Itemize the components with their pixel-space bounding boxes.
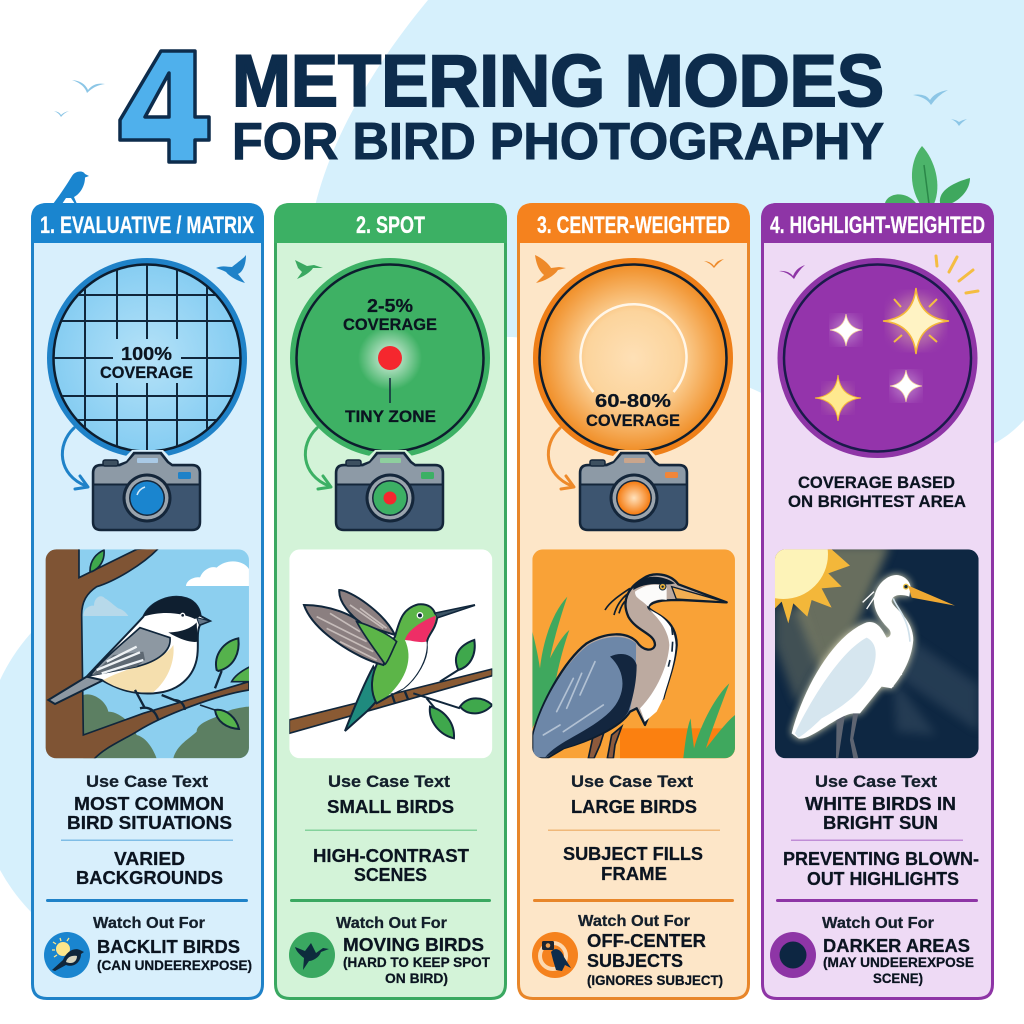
glow (792, 575, 913, 739)
coverage caption (788, 473, 966, 511)
use case text: OUT HIGHLIGHTS (807, 869, 959, 889)
coverage circle: TINY ZONE (345, 407, 436, 426)
use case text: Use Case Text (815, 772, 937, 791)
small birds (535, 255, 724, 283)
title line 1: METERING MODES (232, 41, 884, 122)
watch out for: Watch Out For (336, 915, 447, 932)
header title: 2. SPOT (356, 212, 425, 239)
panel 4: highlight-weighted (739, 203, 994, 998)
use case text: Use Case Text (328, 772, 450, 791)
coverage circle: 2-5% (367, 295, 413, 316)
coverage circle with grid: COVERAGE (100, 363, 193, 382)
arrow to camera (548, 428, 574, 489)
use case text: Use Case Text (571, 772, 693, 791)
watch out for: MOVING BIRDS (343, 935, 484, 955)
camera (90, 450, 203, 534)
use case text: BACKGROUNDS (76, 868, 223, 888)
camera (577, 450, 690, 534)
big numeral 4 (120, 51, 209, 162)
photo: egret (775, 549, 979, 758)
sparkle glows (890, 295, 942, 347)
use case text (290, 772, 491, 902)
watch out for (532, 913, 723, 988)
photo: hummingbird (289, 549, 492, 758)
arrow to camera (305, 428, 331, 489)
use case text (533, 772, 734, 902)
watch out for: SCENE) (873, 971, 923, 986)
use case text (46, 772, 248, 902)
coverage circle: 60-80% (595, 390, 671, 411)
panel 3: center-weighted (517, 203, 750, 998)
watch out for: (CAN UNDEEREXPOSE) (97, 958, 252, 973)
use case text: FRAME (601, 864, 667, 884)
center zone arc (580, 304, 687, 392)
watch out for: Watch Out For (93, 915, 205, 932)
coverage circle (533, 258, 733, 458)
use case text: LARGE BIRDS (571, 797, 697, 817)
coverage circle: COVERAGE (343, 315, 437, 334)
camera (333, 450, 446, 534)
watch out for: ON BIRD) (385, 971, 448, 986)
header bar (31, 203, 264, 243)
photo: heron (532, 549, 735, 758)
use case text (776, 772, 979, 902)
header title: 3. CENTER-WEIGHTED (537, 212, 730, 239)
small hummingbird (295, 260, 323, 279)
sparkles (883, 288, 949, 354)
icon: moving hummingbird (289, 932, 335, 978)
use case text: Use Case Text (86, 772, 208, 791)
coverage circle with sparkles (778, 258, 978, 458)
watch out for (770, 915, 974, 986)
watch out for (289, 915, 491, 986)
watch out for: (HARD TO KEEP SPOT (343, 955, 491, 970)
icon: backlit bird (44, 932, 90, 978)
coverage label: 100% (121, 343, 172, 364)
watch out for: BACKLIT BIRDS (97, 937, 240, 957)
coverage caption: COVERAGE BASED (798, 473, 955, 492)
panel 1: evaluative / matrix (31, 203, 264, 998)
use case text: VARIED (114, 849, 185, 869)
small bird (779, 265, 805, 279)
arrow to camera (62, 428, 88, 489)
use case text: SCENES (354, 865, 427, 885)
leaves top right (885, 146, 970, 204)
title line 2: FOR BIRD PHOTOGRAPHY (232, 113, 884, 171)
use case text: HIGH-CONTRAST (313, 846, 469, 866)
use case text: WHITE BIRDS IN (805, 794, 956, 814)
coverage circle (290, 258, 490, 458)
watch out for: Watch Out For (578, 913, 690, 930)
use case text: BIRD SITUATIONS (67, 813, 232, 833)
icon: dark area (770, 932, 816, 978)
red spot (378, 346, 402, 370)
photo: chickadee (43, 547, 250, 760)
use case text: BRIGHT SUN (823, 813, 938, 833)
highlight rays (936, 256, 978, 293)
coverage caption: ON BRIGHTEST AREA (788, 492, 966, 511)
watch out for: OFF-CENTER (587, 931, 706, 951)
use case text: SMALL BIRDS (327, 797, 454, 817)
title (120, 41, 884, 171)
coverage circle: COVERAGE (586, 411, 680, 430)
watch out for: DARKER AREAS (823, 936, 970, 956)
decorative sky birds (54, 80, 967, 126)
watch out for: (MAY UNDEEREXPOSE (823, 955, 974, 970)
watch out for: SUBJECTS (587, 951, 683, 971)
use case text: PREVENTING BLOWN- (783, 849, 979, 869)
watch out for: Watch Out For (822, 915, 934, 932)
panel 2: spot (274, 203, 507, 998)
header bar (274, 203, 507, 243)
use case text: SUBJECT FILLS (563, 844, 703, 864)
bird silhouette on panel 1 (53, 172, 89, 204)
header bar (761, 203, 994, 243)
watch out for: (IGNORES SUBJECT) (587, 973, 723, 988)
watch out for (44, 915, 252, 978)
icon: off-center bird (532, 932, 578, 978)
coverage circle with grid (47, 250, 247, 470)
header bar (517, 203, 750, 243)
use case text: MOST COMMON (74, 794, 224, 814)
header title: 1. EVALUATIVE / MATRIX (40, 212, 254, 239)
small bird (216, 255, 246, 283)
